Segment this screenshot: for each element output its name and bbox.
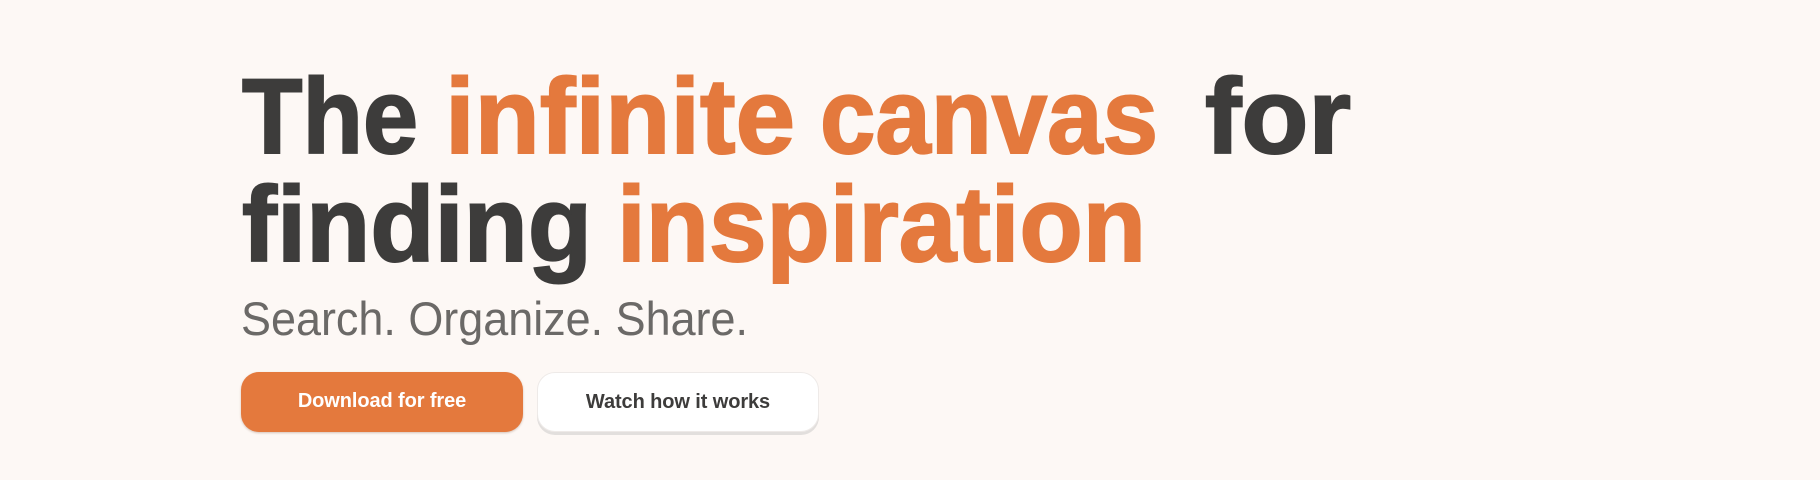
title: The	[242, 56, 418, 176]
title: inspiration	[617, 164, 1146, 284]
button: watch how it works	[537, 372, 819, 432]
title: finding	[242, 164, 592, 284]
title: infinite	[445, 56, 795, 176]
button: download for free	[241, 372, 523, 432]
button: watch how it works: Watch how it works	[586, 391, 770, 413]
title: for	[1205, 56, 1351, 176]
title	[242, 56, 1351, 284]
title: canvas	[820, 56, 1158, 176]
button: download for free: Download for free	[298, 390, 466, 412]
